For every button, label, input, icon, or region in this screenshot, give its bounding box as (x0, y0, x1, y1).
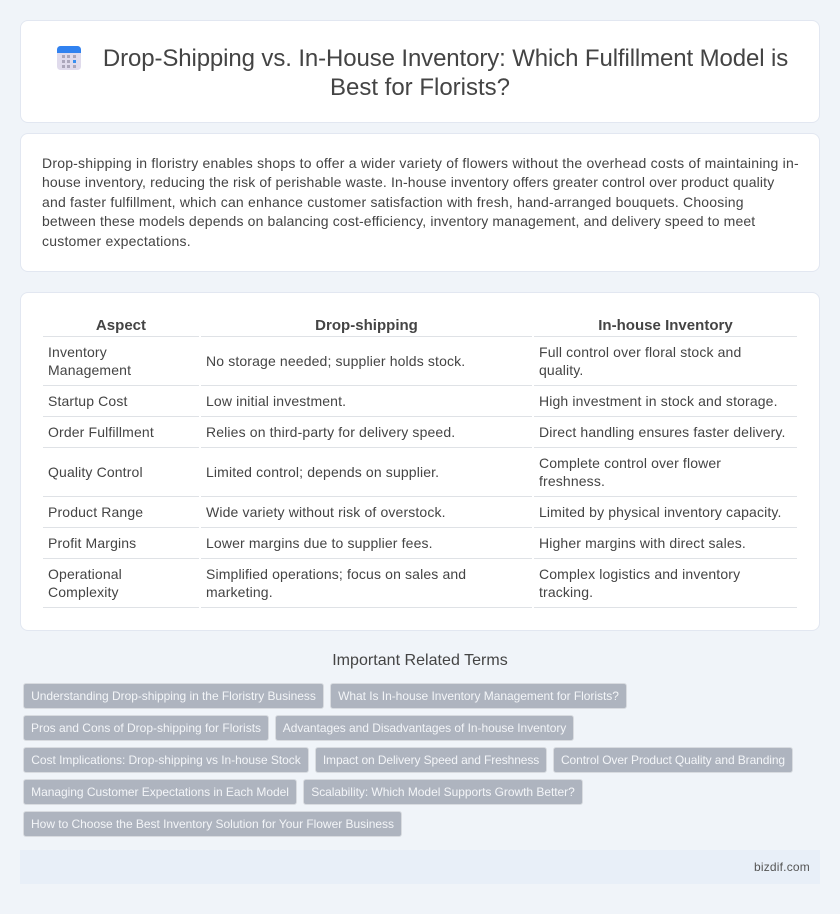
text block: introduction: house inventory, reducing the risk of perishable waste. In-house inventory offers greater control over product quality (42, 174, 774, 190)
text block: introduction: customer expectations. (42, 233, 191, 249)
panel: title header (20, 20, 820, 123)
table header: In-house Inventory (598, 317, 733, 334)
table rows: No storage needed; supplier holds stock. (206, 353, 465, 369)
title: Drop-Shipping vs. In-House Inventory: Which Fulfillment Model is (103, 45, 788, 72)
tag list: related terms: Impact on Delivery Speed and Freshness (323, 753, 539, 767)
table rows: Full control over floral stock and (539, 344, 741, 360)
table rows: Relies on third-party for delivery speed. (206, 424, 455, 440)
table rows: marketing. (206, 584, 273, 600)
table rows: Inventory (48, 344, 107, 360)
table rows: tracking. (539, 584, 593, 600)
table rows: Management (48, 362, 131, 378)
table rows: Quality Control (48, 464, 143, 480)
table rows: Complexity (48, 584, 119, 600)
table header: Drop-shipping (315, 317, 418, 334)
table rows (43, 336, 797, 608)
table rows: freshness. (539, 473, 605, 489)
text block: introduction: and faster fulfillment, which can enhance customer satisfaction with fresh, hand-arranged bouquets. Choosing (42, 194, 744, 210)
table rows: Order Fulfillment (48, 424, 154, 440)
tag list: related terms: How to Choose the Best Inventory Solution for Your Flower Business (31, 817, 394, 831)
table rows: Complete control over flower (539, 455, 721, 471)
tag list: related terms (23, 683, 793, 837)
title (103, 45, 788, 101)
table rows: Wide variety without risk of overstock. (206, 504, 446, 520)
icon: calendar (57, 46, 81, 70)
tag list: related terms: Advantages and Disadvantages of In-house Inventory (283, 721, 566, 735)
table rows: Limited control; depends on supplier. (206, 464, 439, 480)
table rows: Complex logistics and inventory (539, 566, 740, 582)
tag list: related terms: Control Over Product Quality and Branding (561, 753, 785, 767)
tag list: related terms: Pros and Cons of Drop-shipping for Florists (31, 721, 261, 735)
tag list: related terms: Understanding Drop-shipping in the Floristry Business (31, 689, 316, 703)
tag list: related terms: Cost Implications: Drop-shipping vs In-house Stock (31, 753, 301, 767)
table rows: Profit Margins (48, 535, 136, 551)
table rows: Lower margins due to supplier fees. (206, 535, 433, 551)
table rows: Direct handling ensures faster delivery. (539, 424, 786, 440)
table rows: Product Range (48, 504, 143, 520)
heading: important related terms: Important Related Terms (332, 652, 508, 669)
tag list: related terms: What Is In-house Inventory Management for Florists? (338, 689, 619, 703)
table rows: High investment in stock and storage. (539, 393, 778, 409)
table rows: Limited by physical inventory capacity. (539, 504, 782, 520)
panel: introduction (20, 133, 820, 272)
title: Best for Florists? (330, 74, 510, 101)
tag list: related terms: Managing Customer Expectations in Each Model (31, 785, 289, 799)
footer (20, 850, 820, 884)
text block: introduction: between these models depends on balancing cost-efficiency, inventory management, and delivery speed to meet (42, 213, 755, 229)
text block: introduction: Drop-shipping in floristry enables shops to offer a wider variety of flowers without the overhead costs of maintaining in- (42, 155, 799, 171)
table rows: quality. (539, 362, 583, 378)
table rows: Startup Cost (48, 393, 128, 409)
text block: introduction (42, 155, 799, 249)
panel: comparison table (20, 292, 820, 631)
table rows: Simplified operations; focus on sales and (206, 566, 466, 582)
table rows: Low initial investment. (206, 393, 346, 409)
table rows: Operational (48, 566, 122, 582)
table header: Aspect (96, 317, 146, 334)
table rows: Higher margins with direct sales. (539, 535, 746, 551)
table header (96, 317, 733, 334)
footer source text: bizdif.com (754, 860, 810, 874)
tag list: related terms: Scalability: Which Model Supports Growth Better? (311, 785, 575, 799)
